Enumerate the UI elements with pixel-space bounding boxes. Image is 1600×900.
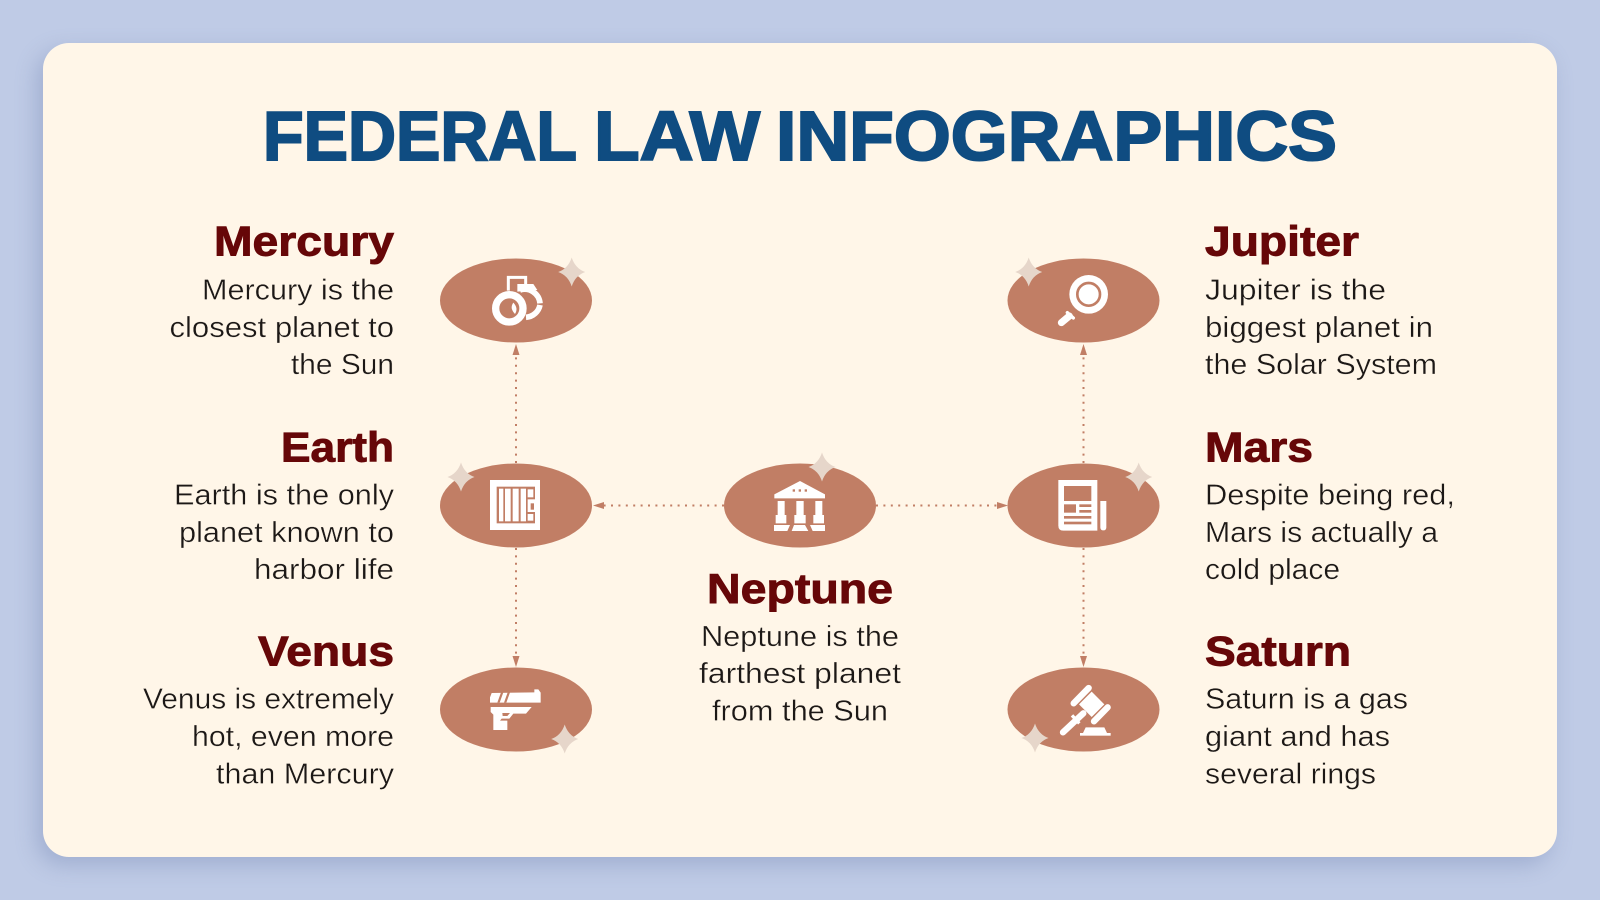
title: LAW: [594, 97, 760, 175]
connector: Earth to Venus arrow: [512, 548, 520, 667]
text block: Neptune: farthest planet: [699, 658, 901, 690]
text block: Mercury: [170, 218, 395, 381]
text block: Venus: than Mercury: [216, 758, 395, 790]
connector: Mars to Saturn arrow: [1080, 548, 1087, 667]
icon: sparkle: [1022, 724, 1048, 752]
text block: Saturn: [1205, 628, 1408, 790]
icon: pistol: [490, 689, 541, 730]
icon: jail cell: [490, 480, 540, 530]
icon: handcuffs: [496, 277, 540, 322]
text block: Earth: [174, 424, 395, 586]
node: Mars newspaper: [1008, 462, 1160, 548]
title: [263, 97, 1337, 175]
icon: sparkle: [551, 724, 578, 754]
text block: Neptune: from the Sun: [712, 696, 888, 728]
icon: sparkle: [808, 452, 836, 482]
connector: Neptune to Mars arrow: [876, 502, 1008, 509]
text block: Mars: Mars is actually a: [1205, 517, 1439, 549]
icon: sparkle: [448, 462, 474, 492]
node: Mercury handcuffs: [440, 258, 592, 342]
node: Venus gun: [440, 668, 592, 754]
title: INFOGRAPHICS: [776, 97, 1337, 175]
connector: Neptune to Earth arrow: [593, 502, 724, 509]
text block: Earth: harbor life: [254, 554, 394, 586]
text block: Mercury: Mercury is the: [202, 274, 394, 306]
text block: Mars: cold place: [1205, 554, 1340, 586]
icon: magnifying glass: [1061, 275, 1108, 323]
text block: Neptune: [699, 565, 901, 728]
connector: Mars to Jupiter arrow: [1080, 344, 1087, 463]
text block: Saturn: several rings: [1205, 758, 1376, 790]
text block: Neptune: Neptune is the: [701, 621, 899, 653]
text block: Jupiter: the Solar System: [1205, 349, 1437, 381]
text block: Neptune: Neptune: [707, 565, 893, 612]
text block: Jupiter: Jupiter: [1205, 218, 1359, 264]
text block: Earth: planet known to: [179, 517, 394, 549]
text block: Mercury: the Sun: [291, 349, 394, 381]
text block: Venus: hot, even more: [192, 721, 394, 753]
text block: Venus: Venus is extremely: [143, 684, 395, 716]
text block: Mars: [1205, 424, 1455, 586]
text block: Mercury: Mercury: [214, 218, 395, 264]
text block: Jupiter: Jupiter is the: [1205, 274, 1386, 306]
icon: sparkle: [1015, 258, 1042, 286]
text block: Venus: Venus: [258, 628, 394, 674]
text block: Saturn: giant and has: [1205, 721, 1390, 753]
icon: courthouse: [774, 481, 825, 531]
icon: newspaper: [1058, 480, 1106, 531]
text block: Mars: Despite being red,: [1205, 480, 1455, 512]
text block: Mars: Mars: [1205, 424, 1313, 470]
text block: Earth: Earth: [281, 424, 394, 470]
connector: Earth to Mercury arrow: [512, 344, 520, 463]
icon: gavel: [1063, 688, 1111, 736]
text block: Venus: [143, 628, 395, 790]
text block: Jupiter: biggest planet in: [1205, 312, 1433, 344]
text block: Jupiter: [1205, 218, 1437, 381]
title: FEDERAL: [263, 97, 577, 175]
node: Neptune courthouse: [724, 452, 876, 548]
node: Saturn gavel: [1008, 668, 1160, 752]
text block: Saturn: Saturn: [1205, 628, 1351, 674]
text block: Earth: Earth is the only: [174, 480, 395, 512]
node: Jupiter magnifier: [1008, 258, 1160, 342]
node: Earth jail: [440, 462, 592, 548]
text block: Saturn: Saturn is a gas: [1205, 684, 1408, 716]
text block: Mercury: closest planet to: [170, 312, 394, 344]
icon: sparkle: [558, 258, 585, 286]
icon: sparkle: [1125, 462, 1152, 492]
